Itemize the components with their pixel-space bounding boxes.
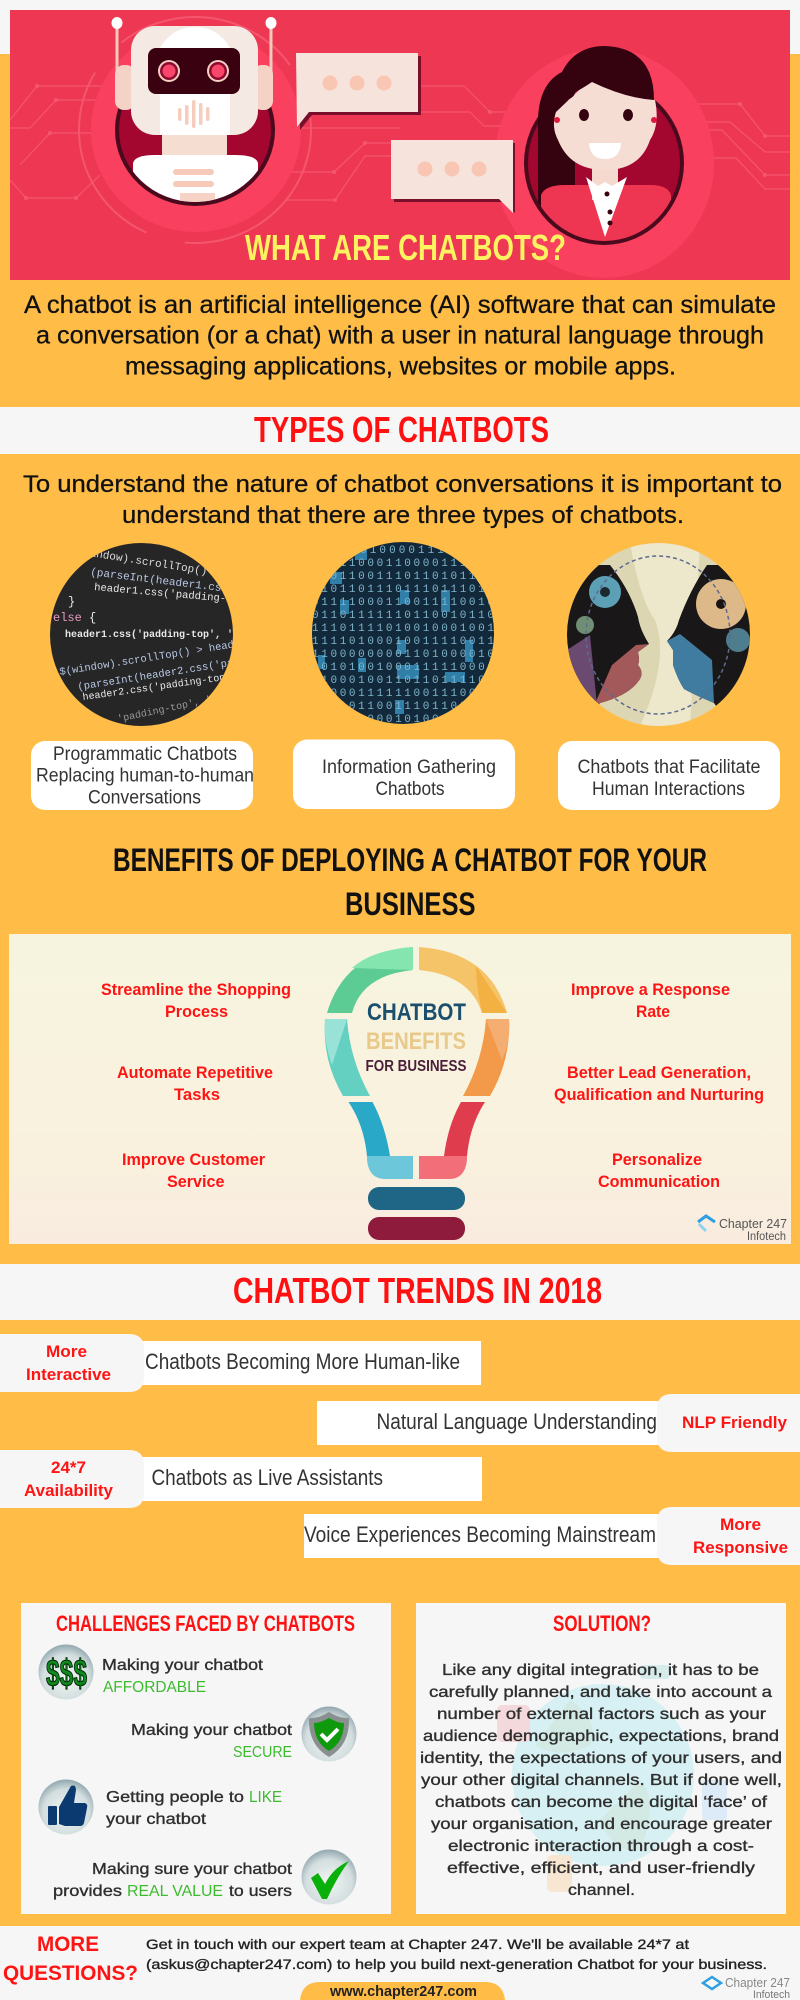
- chatbot trends heading band: [0, 1264, 800, 1320]
- challenge: real value: to users: [229, 1883, 292, 1900]
- trend row: more responsive: Responsive: [693, 1538, 788, 1557]
- benefit list: Automate Repetitive: [117, 1063, 273, 1082]
- trend row: more responsive: [304, 1507, 800, 1565]
- solution text: chatbots can become the digital ‘face’ of: [435, 1794, 768, 1811]
- photo: code on a screen: }: [68, 595, 75, 609]
- photo: code on a screen: else {: [53, 611, 96, 625]
- icon: thumbs up: [38, 1780, 94, 1834]
- benefits heading: BUSINESS: [345, 886, 476, 922]
- types intro text: understand that there are three types of chatbots.: [122, 502, 684, 529]
- light bulb graphic: [325, 947, 509, 1240]
- contact text: (askus@chapter247.com) to help you build next-generation Chatbot for your business.: [146, 1956, 767, 1972]
- card: programmatic chatbots: Conversations: [88, 788, 201, 808]
- photo: binary data: 11101111010010001001: [312, 623, 494, 635]
- photo: code on a screen: 'padding-top', '' + header: [116, 682, 271, 726]
- panel: challenges faced by chatbots: [21, 1603, 391, 1914]
- challenge: like: [106, 1789, 282, 1828]
- photo: binary data: 11000000001101000010: [312, 649, 494, 661]
- types of chatbots heading band: TYPES OF CHATBOTS: [254, 409, 549, 450]
- photo: binary data: 10011000010100011011: [312, 714, 494, 726]
- panel: chatbot benefits: [9, 934, 791, 1244]
- photo: binary data: [312, 542, 494, 726]
- card: information gathering chatbots: [293, 740, 515, 809]
- intro paragraph: A chatbot is an artificial intelligence (AI) software that can simulate: [24, 291, 776, 319]
- benefit list: Qualification and Nurturing: [554, 1085, 764, 1104]
- photo: binary data: 01101111110110010110: [312, 610, 494, 622]
- photo: binary data: 01111000110011110010: [312, 597, 494, 609]
- speech bubble: robot: [296, 53, 421, 130]
- benefit list: [101, 980, 764, 1191]
- solution text: your organisation, and encourage greater: [431, 1816, 773, 1833]
- watermark globe with chat icons: [497, 1665, 727, 1892]
- solution text: channel.: [568, 1882, 635, 1899]
- solution text: audience demographic, expectations, brand: [423, 1728, 779, 1745]
- more questions: MORE: [37, 1933, 99, 1956]
- solution text: effective, efficient, and user-friendly: [447, 1860, 755, 1877]
- challenge: secure: [131, 1722, 293, 1761]
- challenge: like: Getting people to: [106, 1789, 244, 1806]
- types intro text: To understand the nature of chatbot conversations it is important to: [23, 471, 782, 498]
- robot portrait: [79, 17, 311, 243]
- icon: dollar signs: [38, 1644, 94, 1700]
- challenge: like: your chatbot: [106, 1811, 207, 1828]
- card: human interaction chatbots: [558, 741, 780, 810]
- challenge: affordable: AFFORDABLE: [103, 1679, 206, 1696]
- benefit list: Improve Customer: [122, 1150, 265, 1169]
- solution text: identity, the expectations of your users, and: [420, 1750, 782, 1767]
- solution text: number of external factors such as your: [437, 1706, 767, 1723]
- types of chatbots heading band: [0, 407, 800, 454]
- challenge: affordable: [102, 1657, 264, 1696]
- benefit list: Streamline the Shopping: [101, 980, 291, 999]
- photo: two heads with gears: [560, 543, 760, 727]
- benefit list: Improve a Response: [571, 980, 730, 999]
- trend row: more responsive: More: [720, 1515, 761, 1534]
- card: information gathering chatbots: Information Gathering: [322, 757, 496, 778]
- solution text: electronic interaction through a cost-: [448, 1838, 754, 1855]
- benefit list: Tasks: [174, 1085, 220, 1104]
- solution text: Like any digital integration, it has to be: [442, 1662, 759, 1679]
- more questions: [3, 1933, 138, 1985]
- trend row: 24*7 availability: [0, 1450, 482, 1508]
- card: human interaction chatbots: Human Interactions: [592, 779, 745, 800]
- logo: Chapter 247 Infotech: [698, 1216, 787, 1243]
- challenge: real value: [53, 1861, 293, 1900]
- intro paragraph: a conversation (or a chat) with a user in natural language through: [36, 322, 764, 350]
- trend row: more responsive: Voice Experiences Becoming Mainstream: [304, 1522, 656, 1547]
- challenge: affordable: Making your chatbot: [102, 1657, 264, 1674]
- logo: Chapter 247 Infotech: [703, 1976, 790, 2000]
- trend row: NLP friendly: [317, 1394, 800, 1452]
- photo: code on a screen: header1.css('padding-top', '' + header1_in: [65, 629, 317, 641]
- photo: code on a screen: header1.css('padding-top', '': [94, 582, 277, 610]
- footer band: [0, 1926, 800, 2000]
- trend row: 24*7 availability: Availability: [24, 1481, 114, 1500]
- benefit list: Rate: [636, 1002, 670, 1021]
- photo: binary data: 00110110011101100101: [312, 701, 494, 713]
- bulb label: FOR BUSINESS: [366, 1058, 467, 1075]
- solution text: your other digital channels. But if done well,: [421, 1772, 782, 1789]
- speech bubble: woman: [391, 140, 515, 213]
- card: programmatic chatbots: [31, 741, 254, 810]
- logo: Chapter 247 Infotech: Chapter 247: [725, 1976, 790, 1990]
- photo: binary data: 01011001110110101110: [312, 571, 494, 583]
- woman portrait: [494, 46, 714, 278]
- logo: Chapter 247 Infotech: Infotech: [747, 1231, 786, 1243]
- benefits heading: [113, 842, 707, 922]
- website pill: [300, 1982, 505, 2000]
- photo: binary data: 10111000110000111010: [312, 558, 494, 570]
- photo: code on a screen: (parseInt(header1.css('padding: [90, 567, 288, 603]
- benefit list: Better Lead Generation,: [567, 1063, 751, 1082]
- trend row: 24*7 availability: 24*7: [51, 1458, 86, 1477]
- photo: code on a screen: $(window).scrollTop() > header2_initial: [59, 629, 303, 679]
- benefit list: Personalize: [612, 1150, 702, 1169]
- card: programmatic chatbots: Programmatic Chatbots: [53, 744, 237, 765]
- photo: binary data: 00101001000111110001: [312, 662, 494, 674]
- trend row: 24*7 availability: Chatbots as Live Assistants: [152, 1465, 383, 1490]
- challenge: real value: provides: [53, 1883, 122, 1900]
- bulb label: BENEFITS: [366, 1028, 466, 1055]
- bulb label: [366, 999, 467, 1075]
- trend row: NLP friendly: Natural Language Understanding: [376, 1409, 657, 1434]
- bulb label: CHATBOT: [367, 999, 466, 1026]
- challenge: secure: Making your chatbot: [131, 1722, 293, 1739]
- card: human interaction chatbots: Chatbots that Facilitate: [578, 757, 760, 778]
- challenges heading: CHALLENGES FACED BY CHATBOTS: [56, 1611, 355, 1636]
- challenge: secure: SECURE: [233, 1744, 292, 1761]
- icon: check mark: [302, 1850, 356, 1904]
- challenge: real value: Making sure your chatbot: [92, 1861, 293, 1878]
- contact text: [146, 1936, 767, 1972]
- photo: binary data: 11011011101110111010: [312, 584, 494, 596]
- trend row: more interactive: More: [46, 1342, 87, 1361]
- challenge: real value: REAL VALUE: [127, 1883, 223, 1900]
- intro paragraph: messaging applications, websites or mobile apps.: [125, 352, 676, 380]
- benefit list: Process: [165, 1002, 228, 1021]
- hero illustration: robot and woman chatting: [10, 10, 790, 280]
- types intro text: [23, 471, 782, 529]
- chatbot trends heading band: CHATBOT TRENDS IN 2018: [233, 1270, 602, 1311]
- hero title: WHAT ARE CHATBOTS?: [245, 227, 566, 268]
- more questions: QUESTIONS?: [3, 1962, 138, 1985]
- photo: binary data: 0011001000011111010: [312, 545, 492, 557]
- top band: [0, 0, 800, 54]
- intro paragraph: [24, 291, 776, 380]
- card: programmatic chatbots: Replacing human-to-human: [36, 766, 254, 786]
- solution heading: SOLUTION?: [553, 1611, 651, 1636]
- trend row: more interactive: Chatbots Becoming More Human-like: [145, 1349, 460, 1374]
- contact text: Get in touch with our expert team at Chapter 247. We'll be available 24*7 at: [146, 1936, 689, 1952]
- benefit list: Service: [167, 1172, 224, 1191]
- card: information gathering chatbots: Chatbots: [376, 779, 444, 800]
- photo: code on a screen: (parseInt(header2.css('padding-top'),: [77, 646, 309, 694]
- photo: code on a screen: header2.css('padding-top',: [82, 670, 238, 704]
- trend row: more interactive: Interactive: [26, 1365, 111, 1384]
- website pill: www.chapter247.com: [329, 1984, 477, 2000]
- icon: shield: [302, 1706, 356, 1762]
- photo: code on a screen: [50, 543, 233, 726]
- photo: binary data: 11110100010011110011: [312, 636, 494, 648]
- challenge: like: LIKE: [249, 1789, 282, 1806]
- trend row: more interactive: [0, 1334, 481, 1392]
- trend row: NLP friendly: NLP Friendly: [682, 1413, 788, 1432]
- benefit list: Communication: [598, 1172, 720, 1191]
- panel: solution: [416, 1603, 786, 1914]
- solution text: carefully planned, and take into account a: [429, 1684, 772, 1701]
- logo: Chapter 247 Infotech: Chapter 247: [719, 1216, 787, 1231]
- photo: binary data: 10000111111001110001: [312, 688, 494, 700]
- solution text: [420, 1662, 782, 1899]
- icon: dollar signs: $$$: [46, 1653, 87, 1695]
- photo: code on a screen: indow).scrollTop() > header1_: [89, 548, 280, 590]
- photo: binary data: 01000100110110111101: [312, 675, 494, 687]
